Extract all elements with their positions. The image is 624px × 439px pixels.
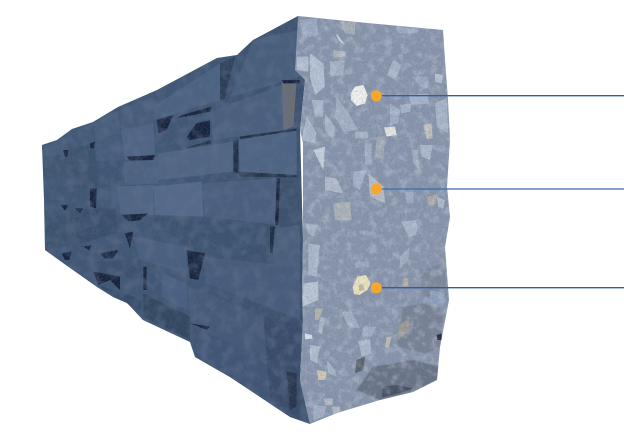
lower rough mottling — [357, 263, 447, 400]
panel: aggregate cut face — [295, 16, 450, 424]
highlight: cream stone bottom — [353, 275, 371, 295]
face mottling — [295, 18, 450, 422]
upper aggregate chips — [297, 18, 448, 220]
leader line: middle — [376, 188, 624, 190]
stone joints and cracks — [60, 57, 300, 410]
face texture grain — [296, 16, 450, 422]
marker dot: top — [371, 90, 382, 101]
lower aggregate chips — [303, 220, 445, 420]
highlight: white stone top — [351, 85, 368, 106]
wall texture grain — [42, 19, 303, 419]
stone courses — [42, 30, 300, 420]
wall mottling — [44, 23, 310, 424]
leader line: top — [376, 95, 624, 97]
marker dot: middle — [371, 184, 382, 194]
marker dot: bottom — [371, 282, 382, 293]
leader line: bottom — [376, 287, 624, 289]
panel: wall side face — [42, 16, 310, 424]
highlight: pale stone — [384, 127, 397, 137]
